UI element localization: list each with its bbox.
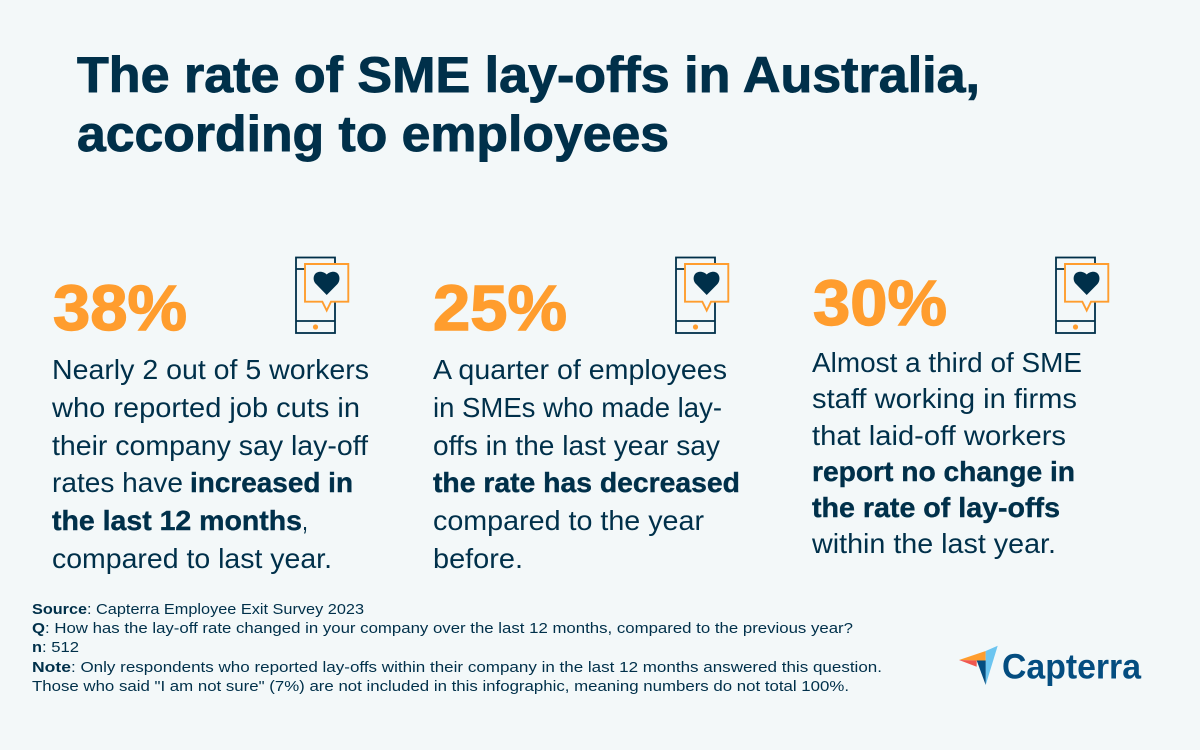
text block: increased: rates have	[52, 467, 183, 498]
text block: increased	[51, 354, 369, 574]
title: according to employees	[77, 106, 669, 162]
footnotes: source and method: : Capterra Employee Exit Survey 2023	[87, 602, 364, 618]
text block: no change: staff working in firms	[812, 383, 1077, 414]
panel: increased 38%	[51, 258, 369, 574]
text block: decreased: in SMEs who made lay-	[433, 392, 722, 423]
text block: no change: within the last year.	[811, 528, 1056, 559]
text block: no change: report no change in	[812, 456, 1075, 487]
icon: phone with heart message	[1056, 258, 1108, 333]
footnotes: source and method: : Only respondents who reported lay-offs within their company in the last 12 months answered this question.	[71, 660, 882, 676]
title	[77, 47, 980, 162]
title: The rate of SME lay-offs in Australia,	[77, 47, 980, 103]
panel: no change 30%	[811, 258, 1108, 559]
text block: decreased: A quarter of employees	[433, 354, 727, 385]
icon: phone with heart message	[676, 258, 728, 333]
footnotes: source and method	[32, 602, 882, 695]
footnotes: source and method: Source	[32, 602, 87, 618]
text block: increased: their company say lay-off	[52, 430, 368, 461]
footnotes: source and method: Note	[32, 660, 71, 676]
footnotes: source and method: n	[32, 640, 42, 656]
text block: increased: ,	[302, 505, 308, 536]
text block: increased: increased in	[190, 467, 353, 498]
statistic: 38%: 38%	[53, 272, 187, 344]
text block: decreased: offs in the last year say	[433, 430, 720, 461]
text block: no change: that laid-off workers	[812, 420, 1066, 451]
logo: Capterra: Capterra	[1002, 648, 1142, 686]
text block: decreased	[433, 354, 740, 574]
text block: decreased: the rate has decreased	[433, 467, 740, 498]
icon: phone with heart message	[296, 258, 348, 333]
footnotes: source and method: Q	[32, 621, 45, 637]
footnotes: source and method: : 512	[42, 640, 79, 656]
footnotes: source and method: : How has the lay-off rate changed in your company over the last 12 months, compared to the previous year?	[45, 621, 853, 637]
text block: decreased: compared to the year	[433, 505, 704, 536]
text block: no change: Almost a third of SME	[812, 347, 1082, 378]
text block: increased: Nearly 2 out of 5 workers	[52, 354, 369, 385]
statistic: 25%: 25%	[433, 272, 567, 344]
text block: no change: the rate of lay-offs	[812, 492, 1060, 523]
text block: increased: the last 12 months	[52, 505, 302, 536]
footnotes: source and method: Those who said "I am not sure" (7%) are not included in this infographic, meaning numbers do not total 100%.	[32, 679, 849, 695]
panel: decreased 25%	[433, 258, 740, 574]
text block: increased: who reported job cuts in	[51, 392, 360, 423]
text block: no change	[811, 347, 1082, 559]
text block: increased: compared to last year.	[52, 543, 332, 574]
statistic: 30%: 30%	[813, 267, 947, 339]
text block: decreased: before.	[433, 543, 523, 574]
